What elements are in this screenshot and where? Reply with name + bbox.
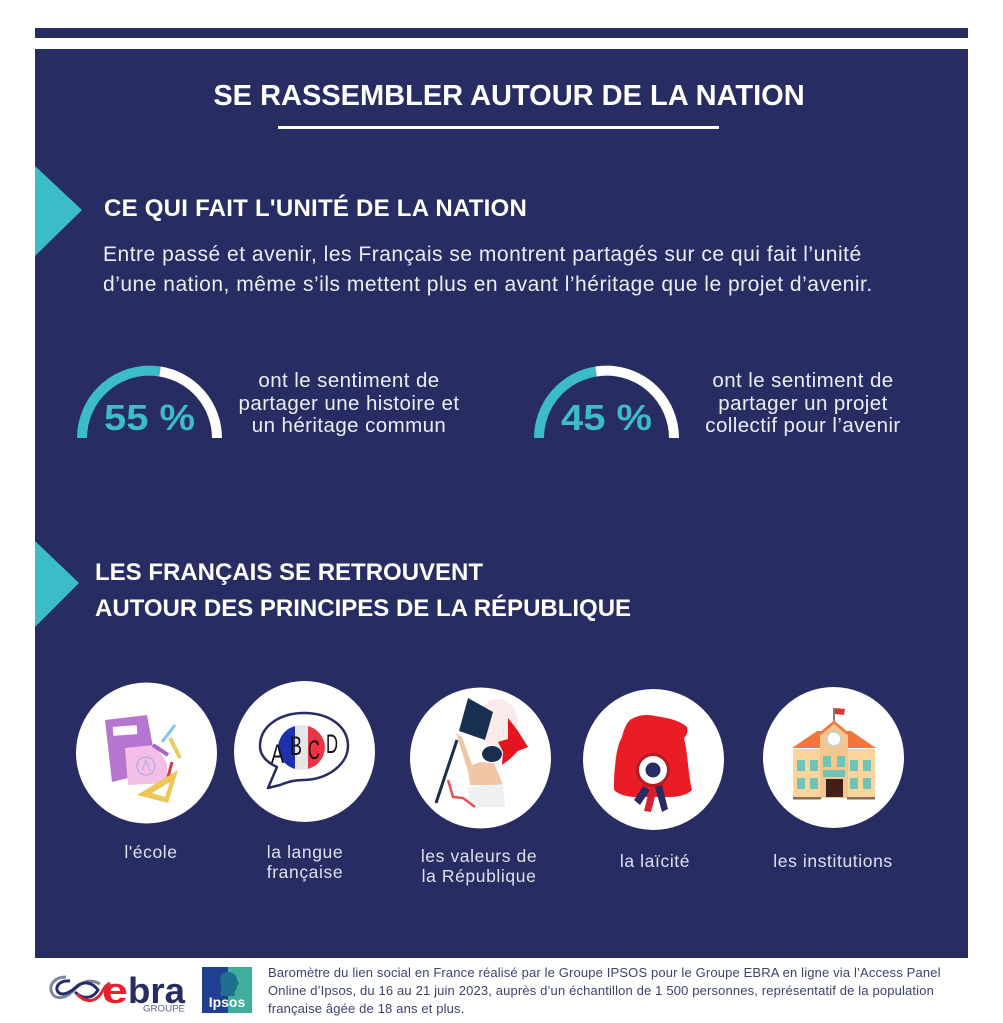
title underline	[278, 126, 719, 129]
gauge text: 45 %: collectif pour l’avenir	[705, 414, 901, 437]
top bar	[35, 28, 968, 38]
source note: française âgée de 18 ans et plus.	[268, 1001, 464, 1016]
heading: principles of the Republic	[95, 559, 631, 622]
logo: EBRA Groupe: bra	[128, 970, 186, 1011]
gauge: 45 %	[534, 366, 679, 438]
label: la laïcité: la laïcité	[620, 851, 690, 871]
icon: speech bubble ABCD: C	[308, 735, 320, 765]
icon: Phrygian cap	[583, 689, 724, 830]
label: la langue française: française	[267, 862, 343, 882]
gauge text: 55 %	[239, 369, 459, 437]
arrow: section 1 marker	[35, 166, 82, 256]
icon: speech bubble ABCD: B	[290, 731, 302, 761]
gauge text: 45 %: ont le sentiment de	[712, 369, 894, 392]
logo: EBRA Groupe	[49, 970, 186, 1014]
logo: Ipsos: Ipsos	[209, 994, 245, 1010]
gauge text: 55 %: un héritage commun	[252, 414, 446, 437]
heading: unity of the nation: CE QUI FAIT L'UNITÉ DE LA NATION	[104, 195, 527, 222]
gauge text: 55 %: ont le sentiment de	[258, 369, 440, 392]
logo: EBRA Groupe: e	[102, 970, 128, 1011]
label: l'école: l'école	[124, 842, 178, 862]
icon: speech bubble ABCD: D	[326, 729, 338, 759]
gauge text: 55 %: partager une histoire et	[239, 392, 459, 414]
icon: school supplies	[76, 682, 217, 824]
icon: speech bubble ABCD: A	[271, 739, 284, 769]
icon: speech bubble ABCD	[234, 681, 375, 822]
gauge text: 45 %: partager un projet	[718, 392, 888, 414]
heading: principles of the Republic: AUTOUR DES PRINCIPES DE LA RÉPUBLIQUE	[95, 595, 631, 622]
intro text: d’une nation, même s’ils mettent plus en avant l’héritage que le projet d’avenir.	[103, 273, 873, 296]
intro text	[103, 243, 873, 296]
label: la langue française: la langue	[267, 842, 343, 862]
label: les institutions: les institutions	[773, 851, 893, 871]
icon: Marianne with flag	[410, 688, 551, 828]
gauge text: 45 %	[705, 369, 901, 437]
intro text: Entre passé et avenir, les Français se montrent partagés sur ce qui fait l’unité	[103, 243, 862, 266]
label: les valeurs de la République	[421, 846, 537, 886]
label: les valeurs de la République: la République	[422, 866, 536, 886]
source note	[268, 965, 941, 1016]
icon: public building	[763, 687, 904, 828]
logo: Ipsos	[202, 967, 252, 1013]
title: SE RASSEMBLER AUTOUR DE LA NATION	[213, 80, 805, 112]
label: la langue française	[267, 842, 343, 882]
heading: principles of the Republic: LES FRANÇAIS SE RETROUVENT	[95, 559, 483, 586]
logo: EBRA Groupe: GROUPE	[143, 1004, 185, 1014]
arrow: section 2 marker	[35, 541, 79, 627]
source note: Baromètre du lien social en France réalisé par le Groupe IPSOS pour le Groupe EBRA en ligne via l’Access Panel	[268, 965, 941, 980]
label: les valeurs de la République: les valeurs de	[421, 846, 537, 866]
source note: Online d’Ipsos, du 16 au 21 juin 2023, auprès d’un échantillon de 1 500 personnes, représentatif de la population	[268, 983, 934, 998]
gauge: 55 %	[77, 366, 222, 438]
gauge: 55 %: 55 %	[104, 397, 195, 438]
gauge: 45 %: 45 %	[561, 397, 652, 438]
